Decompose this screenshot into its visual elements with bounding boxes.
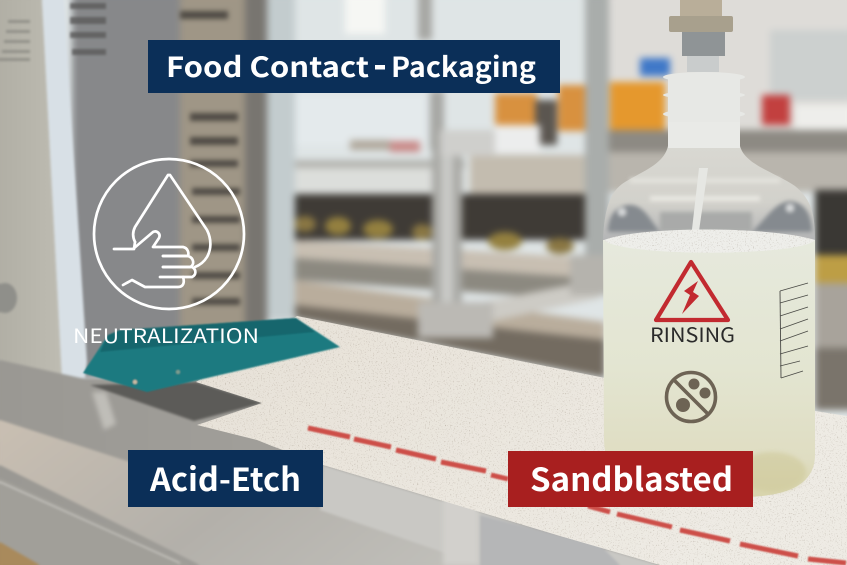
machine panel highlight edge xyxy=(42,0,87,378)
glass bottle with cloudy liquid xyxy=(603,0,815,497)
label: sandblasted xyxy=(508,451,753,507)
bottle ribbed collar xyxy=(663,72,745,148)
bottle dark reflections xyxy=(608,178,812,232)
label: sandblasted: Sandblasted xyxy=(530,455,733,501)
bottle lower glass xyxy=(738,452,806,492)
speckled white work surface xyxy=(196,316,847,565)
red dashed line xyxy=(308,428,846,563)
icon: prohibited particles xyxy=(666,372,716,422)
bottle shoulder glass xyxy=(603,146,815,240)
label: acid-etch: Acid-Etch xyxy=(149,455,301,501)
bottle metal nozzle xyxy=(669,0,733,72)
label: neutralization: NEUTRALIZATION xyxy=(73,320,259,349)
icon: warning triangle with bolt xyxy=(656,262,728,320)
label: acid-etch xyxy=(128,450,323,507)
bottle liquid body xyxy=(603,240,815,497)
bottle dip tube xyxy=(691,168,708,238)
title banner: Packaging xyxy=(391,46,536,86)
dark mat xyxy=(90,382,263,421)
icon: hand and water drop in circle xyxy=(94,159,244,309)
column dark bands xyxy=(180,11,240,305)
bottle foam layer xyxy=(604,230,815,253)
machine panel body xyxy=(0,0,62,378)
steel table xyxy=(0,360,847,565)
label: rinsing: RINSING xyxy=(650,319,735,348)
title banner xyxy=(148,40,560,93)
bottle scale label xyxy=(780,283,808,378)
title banner: Food Contact xyxy=(166,46,369,86)
vent lines xyxy=(70,3,106,55)
teal tray xyxy=(83,318,340,392)
